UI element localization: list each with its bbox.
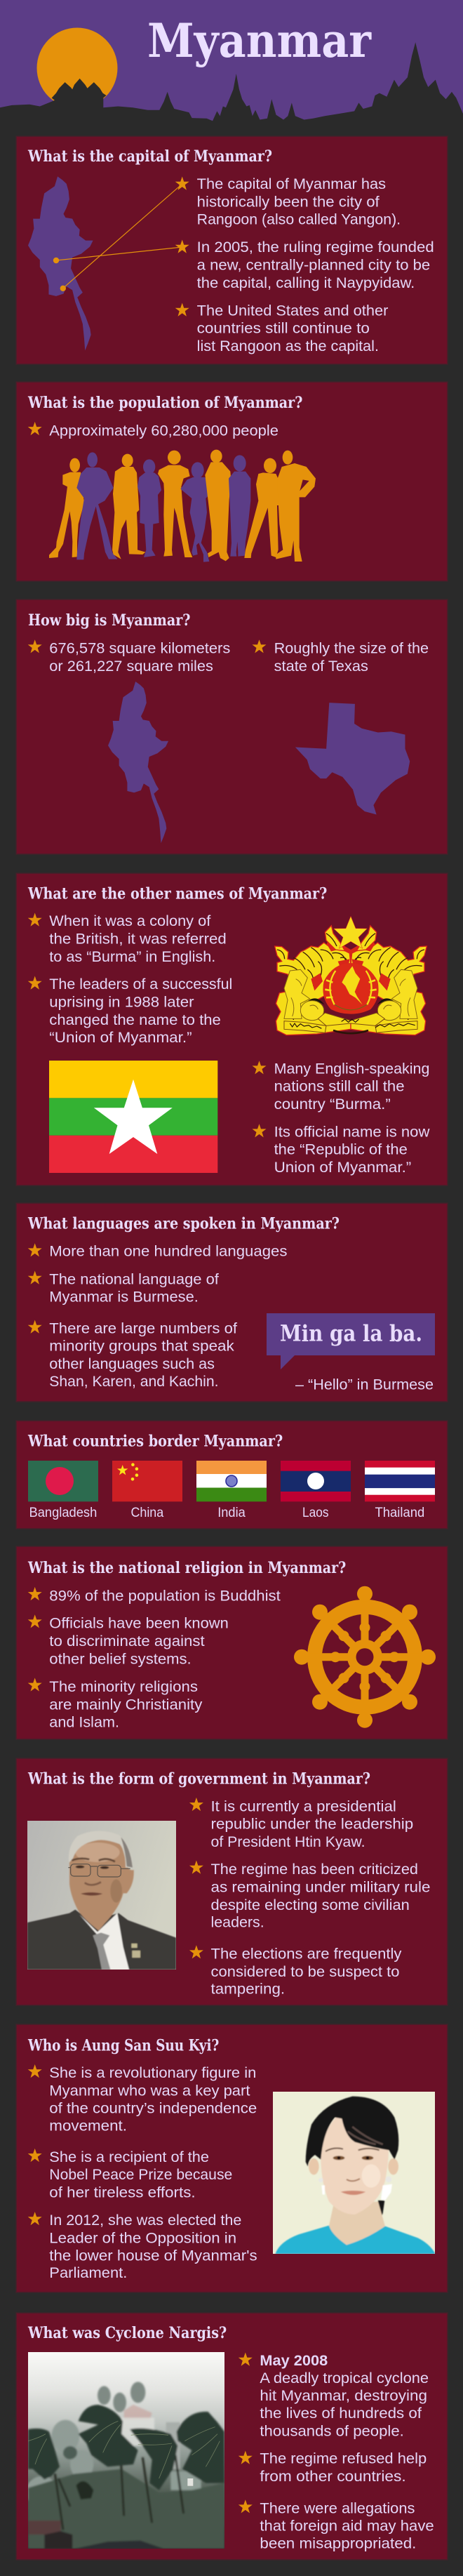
icon: setting sun [36,28,118,108]
bullet: Rangoon (also called Yangon). [197,212,401,228]
heading: What is the capital of Myanmar? [27,147,272,166]
flag: Laos: Laos [302,1506,328,1520]
photo: Aung San Suu Kyi [273,2092,435,2254]
hello caption: – “Hello” in Burmese [295,1376,434,1393]
panel: religion [17,1547,447,1739]
header banner [0,0,463,145]
bullet: The capital of Myanmar has [197,176,386,192]
bullet: movement. [49,2118,127,2135]
speech bubble [267,1313,435,1369]
bullet: uprising in 1988 later [49,994,194,1010]
panel: size [17,600,447,854]
flag: Bangladesh: Bangladesh [29,1506,97,1520]
speech bubble: Min ga la ba. [280,1320,422,1347]
heading: How big is Myanmar? [28,611,191,630]
map of Myanmar [28,176,93,350]
bullet [28,2149,232,2200]
bullet: In 2005, the ruling regime founded [197,239,434,255]
flag: Bangladesh [28,1461,98,1520]
bullet: nations still call the [274,1078,405,1094]
bullet: are mainly Christianity [49,1697,203,1713]
bullet [28,2064,257,2135]
panel: other names [17,874,447,1185]
bullet [189,1860,431,1930]
bullet [28,2212,257,2281]
heading: What is the national religion in Myanmar? [27,1559,346,1577]
bullet: Parliament. [49,2265,127,2281]
bullet [28,1320,237,1390]
bullet: tampering. [210,1981,285,1998]
bullet: state of Texas [274,658,368,675]
bullet: Approximately 60,280,000 people [49,423,279,439]
bullet: other belief systems. [49,1651,192,1668]
bullet: The leaders of a successful [49,976,232,992]
bullet: Shan, Karen, and Kachin. [49,1374,219,1390]
bullet [239,2353,429,2439]
flag: India: India [217,1506,246,1520]
photo: storm-blown palms [26,2352,224,2549]
bullet: from other countries. [260,2469,406,2485]
bullet: that foreign aid may have [260,2518,434,2534]
heading: What countries border Myanmar? [27,1433,283,1451]
flag: China [112,1461,182,1520]
bullet: the “Republic of the [274,1141,408,1157]
panel: population [17,383,447,580]
bullet: list Rangoon as the capital. [197,338,379,354]
bullet: 89% of the population is Buddhist [49,1588,281,1604]
bullet [28,639,230,675]
flag: China: China [130,1506,164,1520]
bullet [189,1798,413,1850]
bullet [253,1061,429,1113]
bullet: The regime refused help [260,2451,427,2467]
bullet: She is a revolutionary figure in [49,2065,256,2081]
panel: languages [17,1204,447,1401]
bullet: of her tireless efforts. [49,2184,196,2200]
bullet [175,176,401,228]
heading: What is the form of government in Myanmar? [27,1770,370,1788]
bullet: a new, centrally-planned city to be [197,258,430,274]
bullet: despite electing some civilian [210,1897,410,1913]
bullet: It is currently a presidential [210,1798,396,1814]
bullet: thousands of people. [260,2423,404,2439]
heading: What are the other names of Myanmar? [27,885,327,903]
bullet: When it was a colony of [49,913,210,929]
bullet: In 2012, she was elected the [49,2212,241,2229]
bullet: A deadly tropical cyclone [260,2370,429,2386]
bullet: as remaining under military rule [210,1880,431,1895]
bullet: Leader of the Opposition in [49,2230,236,2246]
flag: Thailand: Thailand [375,1506,424,1520]
bullet: 676,578 square kilometers [49,641,230,657]
bullet: the lives of hundreds of [260,2405,422,2422]
bullet [175,303,388,354]
bullet: The national language of [49,1271,219,1287]
heading: What is the population of Myanmar? [27,394,302,412]
bullet [253,639,429,675]
bullet: She is a recipient of the [49,2149,209,2165]
bullet: The United States and other [197,303,388,319]
bullet [189,1945,402,1998]
bullet [239,2499,434,2552]
bullet: The elections are frequently [210,1946,402,1963]
panel: borders [17,1421,447,1528]
bullet [28,1678,203,1730]
photo: president [27,1821,176,1970]
bullet [28,912,227,965]
bullet [175,239,434,291]
map of Texas [295,703,410,814]
bullet: or 261,227 square miles [49,658,213,675]
bullet: hit Myanmar, destroying [260,2388,427,2404]
bullet [28,1614,229,1668]
heading: What was Cyclone Nargis? [27,2324,227,2342]
bullet: to as “Burma” in English. [49,949,215,965]
coat of arms emblem [275,916,427,1035]
bullet: Officials have been known [49,1616,229,1632]
bullet: of President Htin Kyaw. [210,1834,365,1850]
flag: India [196,1461,267,1520]
bullet: There were allegations [260,2500,415,2516]
bullet: the British, it was referred [49,931,227,947]
bullet: and Islam. [49,1714,119,1730]
bullet: the capital, calling it Naypyidaw. [197,275,415,291]
bullet: Many English-speaking [274,1061,429,1077]
bullet [239,2451,427,2485]
bullet: historically been the city of [197,194,380,211]
bullet: the lower house of Myanmar's [49,2248,257,2264]
bullet: Roughly the size of the [274,641,429,657]
bullet: country “Burma.” [274,1096,391,1113]
flag of Myanmar [49,1061,217,1173]
bullet: other languages such as [49,1356,215,1372]
bullet: “Union of Myanmar.” [49,1030,192,1046]
bullet: Nobel Peace Prize because [49,2167,232,2183]
bullet: of the country’s independence [49,2100,257,2117]
title: Myanmar [147,13,372,68]
panel: Cyclone Nargis [17,2313,447,2559]
bullet [253,1124,430,1176]
bullet: countries still continue to [197,320,370,337]
bullet: May 2008 [260,2353,328,2369]
panel: Aung San Suu Kyi [17,2025,447,2292]
bullet: been misappropriated. [260,2536,416,2552]
map of Myanmar [108,682,168,843]
bullet: The regime has been criticized [210,1861,418,1878]
bullet: considered to be suspect to [210,1964,400,1980]
connector lines and city dots [53,184,182,291]
icon: dharma wheel [294,1586,436,1728]
bullet: There are large numbers of [49,1320,237,1336]
flag: Thailand [365,1461,435,1520]
bullet: More than one hundred languages [49,1243,288,1259]
bullet: Myanmar who was a key part [49,2083,250,2099]
panel: capital [17,137,447,364]
bullet: minority groups that speak [49,1338,234,1354]
skyline silhouette [0,42,463,145]
bullet [28,976,232,1046]
heading: What languages are spoken in Myanmar? [27,1215,340,1233]
bullet [28,1270,219,1305]
bullet: leaders. [210,1915,264,1930]
heading: Who is Aung San Suu Kyi? [27,2036,219,2054]
bullet: to discriminate against [49,1633,205,1649]
bullet: Its official name is now [274,1124,430,1140]
bullet: The minority religions [49,1679,198,1695]
flag: Laos [281,1461,351,1520]
bullet: Union of Myanmar.” [274,1160,411,1176]
panel: government [17,1759,447,2005]
bullet: changed the name to the [49,1012,221,1028]
people silhouettes [49,450,316,562]
bullet: Myanmar is Burmese. [49,1289,199,1305]
bullet: republic under the leadership [210,1816,413,1832]
